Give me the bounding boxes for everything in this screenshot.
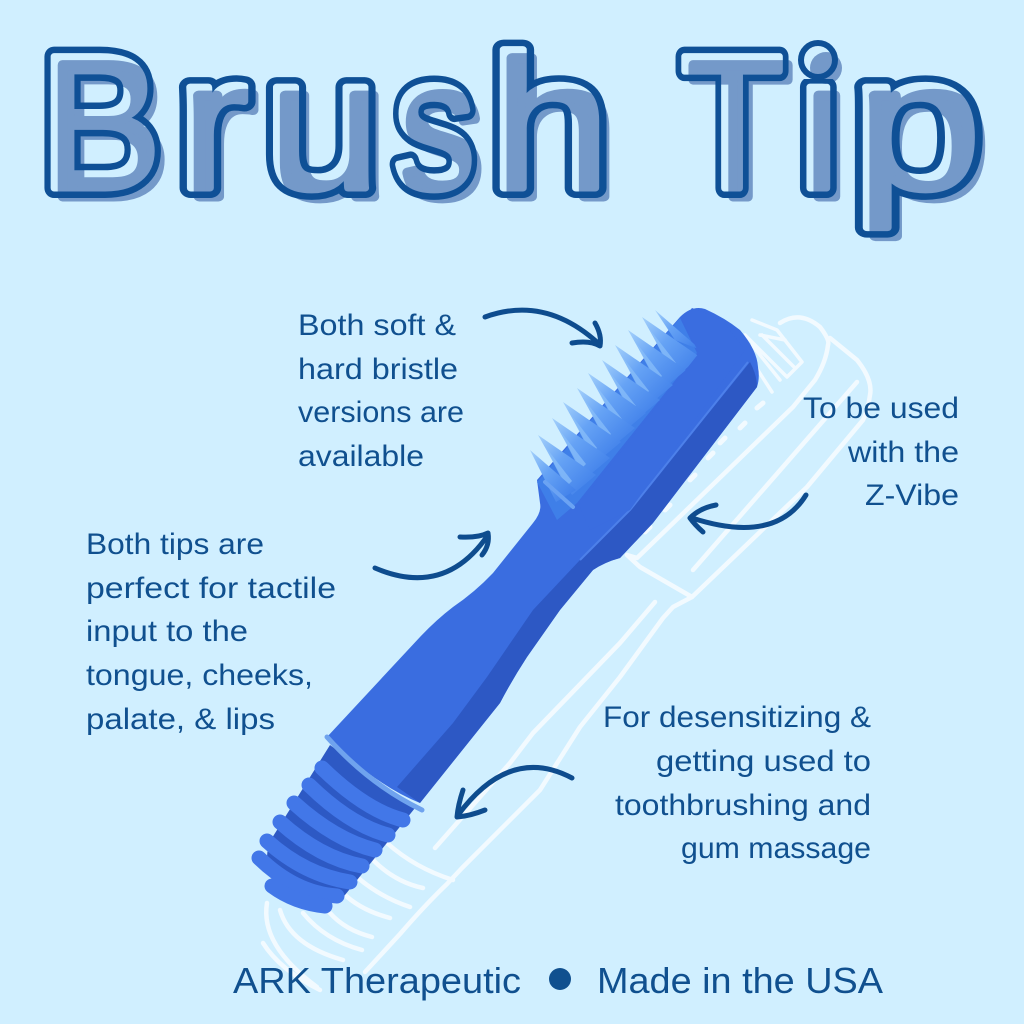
text: tactile input: palate, & lips xyxy=(86,703,275,736)
head band xyxy=(579,308,745,530)
near-end bristle bar xyxy=(545,482,573,507)
title: T xyxy=(689,24,792,238)
text: bristle versions: available xyxy=(298,440,424,473)
handle and head xyxy=(327,308,759,803)
title: u xyxy=(272,24,388,238)
bristles xyxy=(530,310,701,502)
text: bristle versions: versions are xyxy=(298,396,464,429)
text: desensitizing: getting used to xyxy=(656,745,871,778)
silicone brush tip xyxy=(259,308,759,906)
title: B xyxy=(48,24,170,238)
arrow: bristles xyxy=(485,310,600,346)
text: tactile input xyxy=(86,528,336,736)
arrow: desensitizing xyxy=(457,767,572,817)
arrow: tactile xyxy=(375,533,488,578)
text: tactile input: perfect for tactile xyxy=(86,572,336,605)
text: Z-Vibe xyxy=(803,392,959,512)
text: bristle versions: hard bristle xyxy=(298,353,458,386)
bristle recess xyxy=(537,318,697,520)
footer: Made in the USA xyxy=(597,960,883,1001)
title: s xyxy=(402,24,483,238)
text: desensitizing: toothbrushing and xyxy=(615,789,871,822)
toothbrush sketch xyxy=(263,317,870,990)
ridge line xyxy=(580,362,748,560)
shaded side xyxy=(397,362,757,803)
text: Z-Vibe: with the xyxy=(847,436,959,469)
text: desensitizing: For desensitizing & xyxy=(603,701,871,734)
footer xyxy=(233,960,883,1001)
text: tactile input: input to the xyxy=(86,615,248,648)
text: Z-Vibe: Z-Vibe xyxy=(865,479,959,512)
ribbed base xyxy=(267,745,415,904)
text: desensitizing xyxy=(603,701,871,865)
collar ring xyxy=(327,737,422,810)
title: h xyxy=(497,24,618,238)
rings xyxy=(259,768,403,906)
title: i xyxy=(806,24,848,238)
footer: ARK Therapeutic xyxy=(233,960,521,1001)
text: tactile input: tongue, cheeks, xyxy=(86,659,313,692)
text: tactile input: Both tips are xyxy=(86,528,264,561)
title: p xyxy=(860,24,989,238)
text: desensitizing: gum massage xyxy=(681,832,871,865)
title: r xyxy=(184,24,256,238)
title xyxy=(44,40,986,242)
text: bristle versions: Both soft & xyxy=(298,309,456,342)
text: bristle versions xyxy=(298,309,464,473)
text: Z-Vibe: To be used xyxy=(803,392,959,425)
arrow: Z-Vibe xyxy=(690,495,806,532)
